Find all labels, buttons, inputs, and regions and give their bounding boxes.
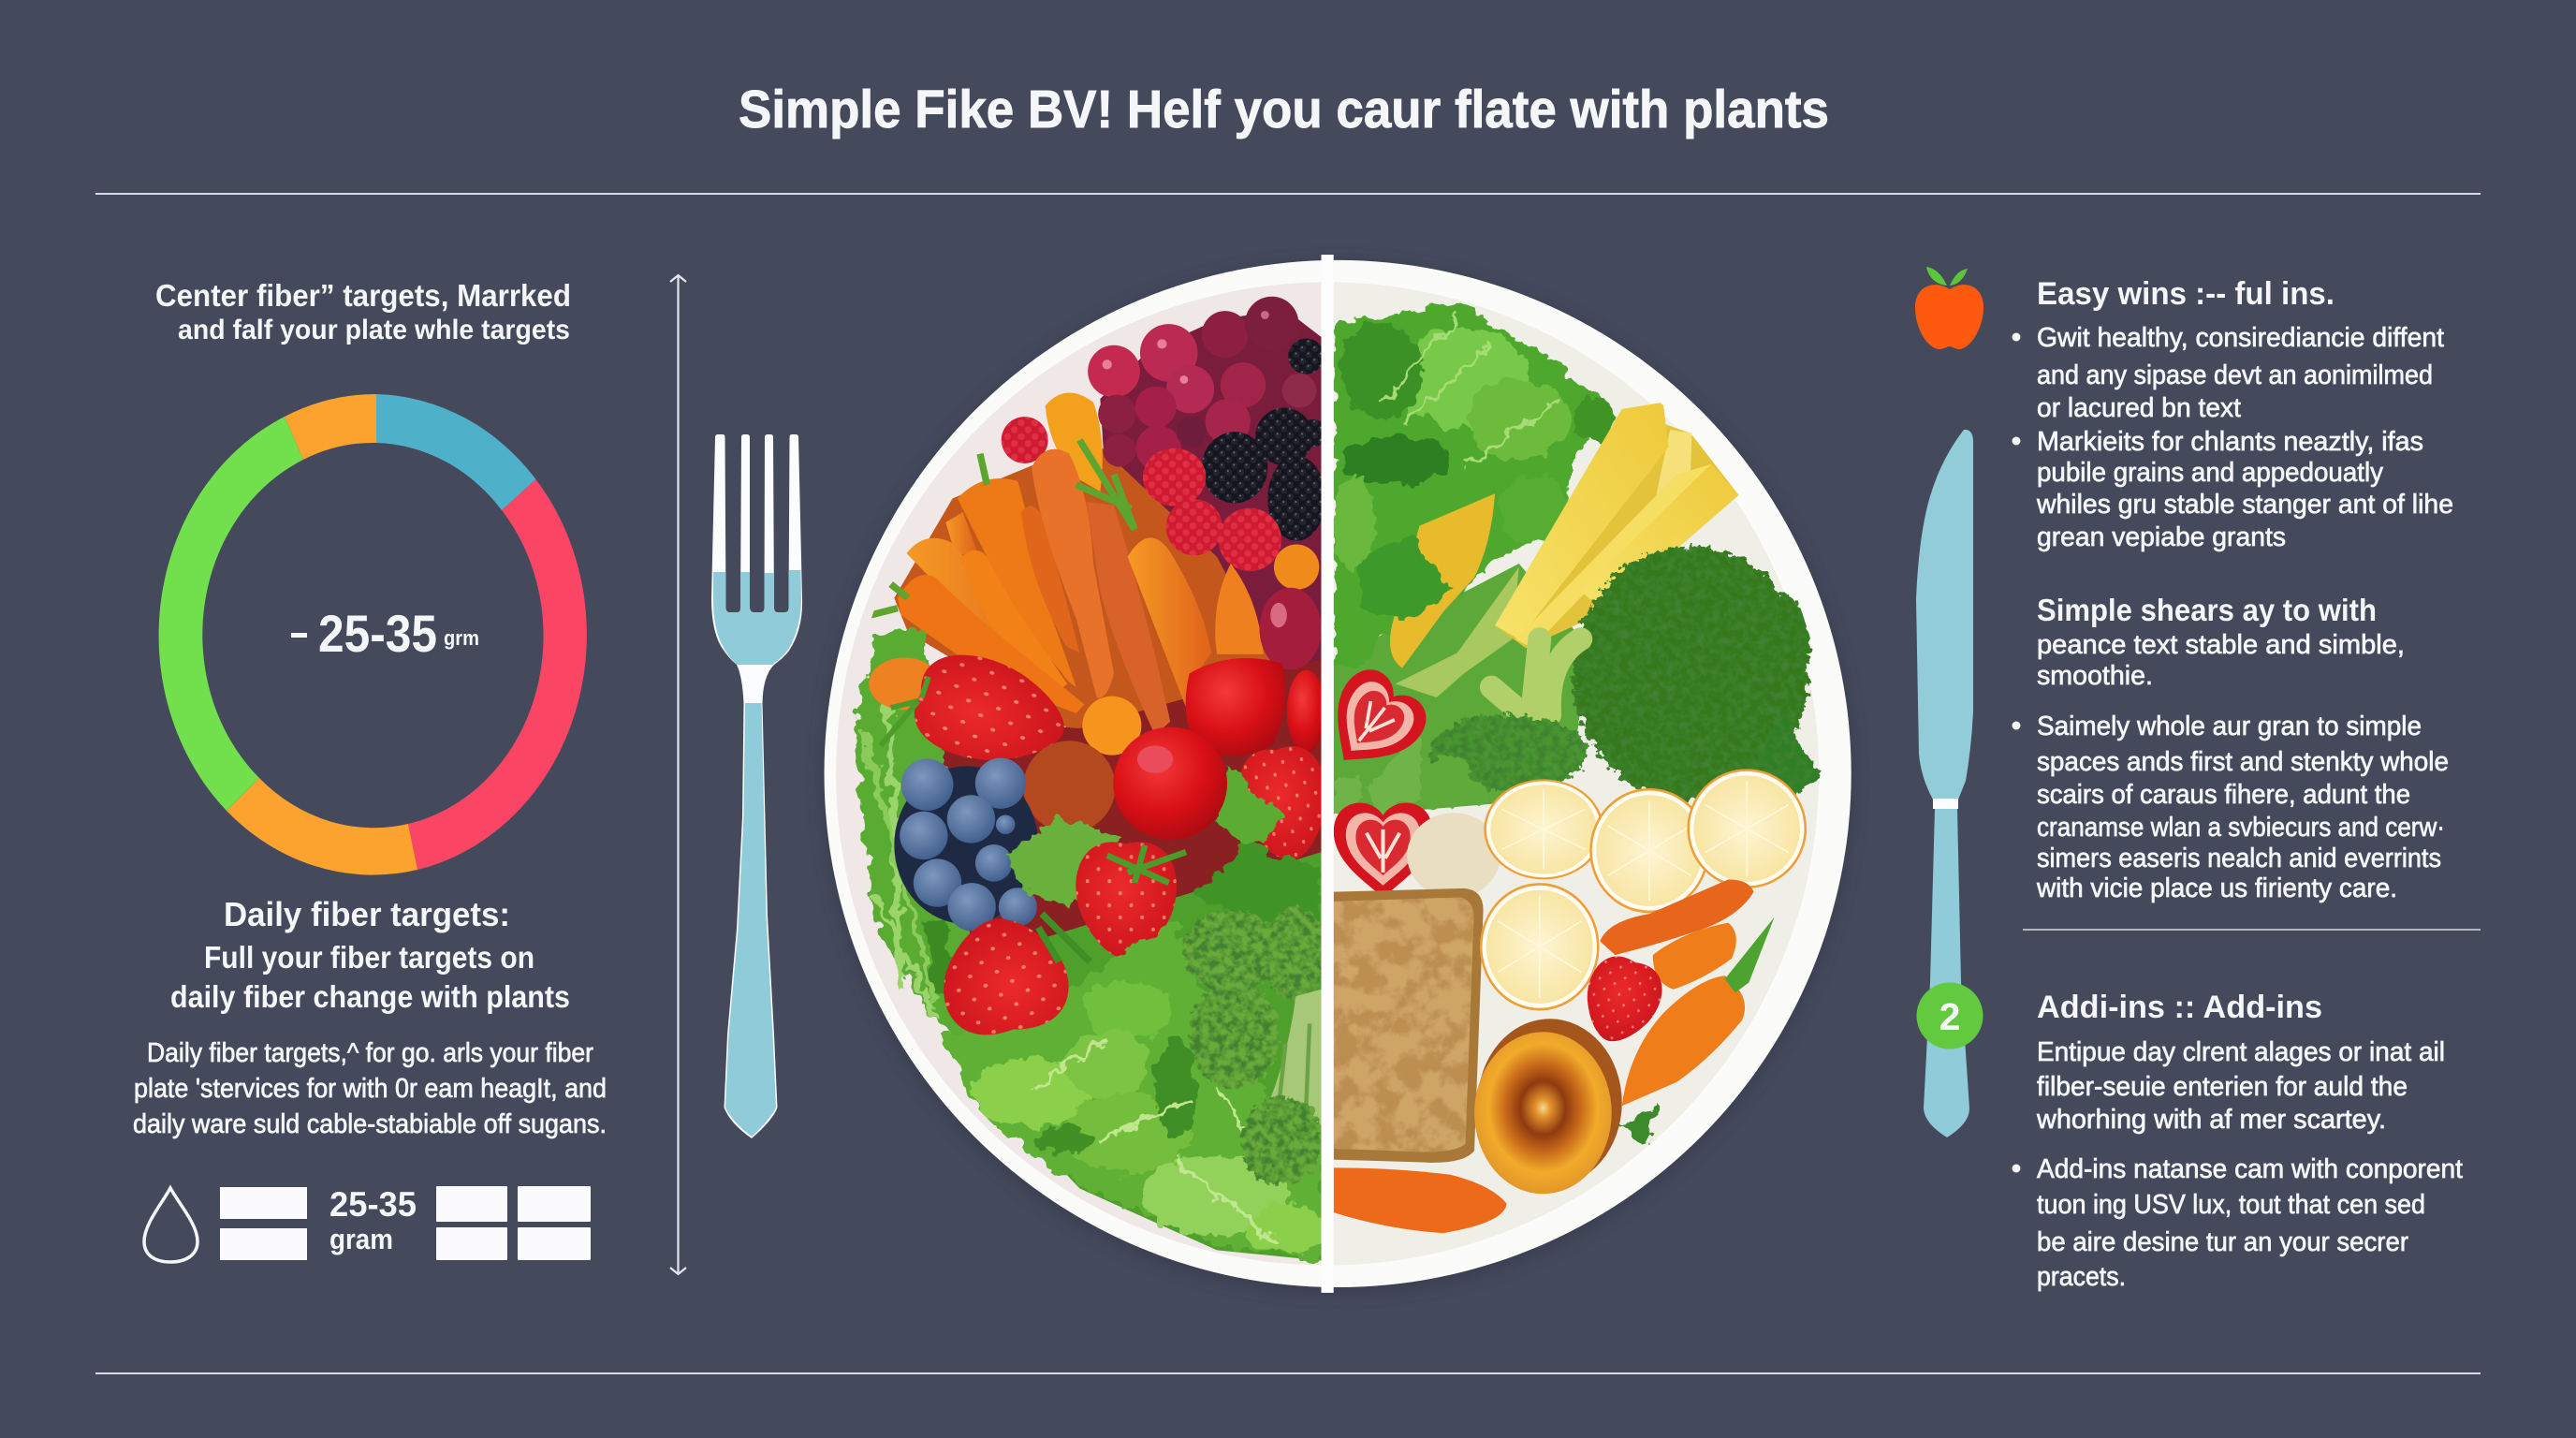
arrow: vertical scale bbox=[670, 275, 686, 1274]
bullet list: add-ins: tuon ing USV lux, tout that cen sed bbox=[2037, 1190, 2425, 1220]
bullet list: add-ins: pracets. bbox=[2037, 1262, 2126, 1292]
text: add-ins body: filber-seuie enterien for auld the bbox=[2037, 1072, 2408, 1102]
broccoli small floret bbox=[1429, 639, 1588, 790]
bullet list: easy wins: or lacured bn text bbox=[2037, 393, 2241, 423]
roasted squash bbox=[1474, 1019, 1622, 1194]
broccoli left bbox=[1182, 907, 1326, 1185]
plate surface bbox=[836, 282, 1819, 1266]
carrot stems bbox=[871, 440, 1134, 615]
carrots bbox=[898, 449, 1264, 735]
bullet list: simple: spaces ands first and stenkty whole bbox=[2037, 747, 2449, 777]
daily fiber heading: Daily fiber targets: bbox=[224, 895, 510, 933]
daily fiber heading bbox=[170, 895, 570, 1014]
legend value: 25-35 gram bbox=[329, 1185, 417, 1255]
orange berries and plum bbox=[869, 544, 1322, 756]
raspberries bbox=[1002, 417, 1281, 571]
donut chart: 25-35 grm bbox=[159, 394, 587, 875]
leaf herbs bbox=[1004, 763, 1320, 928]
lemon slice lower bbox=[1480, 883, 1600, 1010]
lemon slices bbox=[1484, 769, 1807, 913]
bullet list: simple: cranamse wlan a svbiecurs and cerw· bbox=[2037, 813, 2445, 843]
heading: simple shears: Simple shears ay to with bbox=[2037, 593, 2377, 627]
donut centre value: 25-35 bbox=[318, 604, 437, 663]
daily fiber heading: Full your fiber targets on bbox=[204, 940, 534, 975]
daily fiber body text: plate 'stervices for with 0r eam heagIt, and bbox=[134, 1074, 607, 1104]
yellow sticks bbox=[1495, 403, 1738, 648]
heading: easy wins: Easy wins :-- ful ins. bbox=[2037, 276, 2334, 312]
plate shadow bbox=[822, 261, 1854, 1294]
left heading: and falf your plate whle targets bbox=[178, 315, 570, 345]
badge: number 2: 2 bbox=[1939, 995, 1960, 1038]
bullet list: simple: scairs of caraus fihere, adunt the bbox=[2037, 780, 2410, 810]
tomato bbox=[1023, 741, 1115, 833]
icon: water drop bbox=[144, 1188, 198, 1262]
panel: left fiber targets bbox=[133, 278, 607, 1262]
legend value: 25-35 gram: 25-35 bbox=[329, 1185, 417, 1224]
bullet list: simple: Saimely whole aur gran to simple bbox=[2037, 712, 2422, 741]
daily fiber body text: daily ware suld cable-stabiable off sugans. bbox=[133, 1109, 607, 1139]
right half: fruits and vegetables bbox=[1309, 302, 1821, 1233]
strawberry centre bbox=[1076, 842, 1177, 959]
lettuce bottom bbox=[943, 920, 1326, 1260]
heart strawberry slices bbox=[1309, 660, 1436, 787]
plate rim bbox=[825, 260, 1852, 1287]
strawberry one leaves bbox=[881, 677, 929, 745]
green herbs left strip bbox=[852, 627, 970, 1035]
lettuce leaf over potato bbox=[1361, 536, 1454, 622]
left heading bbox=[155, 278, 571, 345]
daily fiber body text bbox=[133, 1038, 607, 1139]
left heading: Center fiber” targets, Marrked bbox=[155, 278, 571, 313]
legend blocks left bbox=[220, 1187, 307, 1260]
icon: fork bbox=[711, 434, 802, 1138]
toast bbox=[1334, 888, 1484, 1163]
title: Simple Fike BV! Helf you caur flate with plants bbox=[739, 80, 1829, 139]
yellow potato bbox=[1390, 493, 1495, 668]
panel: easy wins text bbox=[1917, 276, 2481, 1292]
potato bbox=[1407, 813, 1500, 898]
orange carrots bbox=[1334, 879, 1775, 1233]
text: add-ins body: whorhing with af mer scartey. bbox=[2036, 1105, 2386, 1135]
yellow pepper bbox=[1046, 393, 1103, 492]
bullet list: simple bbox=[2012, 712, 2449, 903]
bullet list: add-ins: Add-ins natanse cam with conporent bbox=[2037, 1154, 2463, 1184]
heading: add-ins: Addi-ins :: Add-ins bbox=[2037, 990, 2322, 1025]
donut centre value: grm bbox=[444, 626, 479, 650]
legend value: 25-35 gram: gram bbox=[329, 1223, 393, 1255]
bullet list: easy wins: grean vepiabe grants bbox=[2037, 522, 2286, 552]
herb sprig bbox=[1622, 1103, 1660, 1144]
bullet list: easy wins bbox=[2012, 323, 2453, 552]
red pepper bbox=[1186, 658, 1325, 756]
text: simple shears body: smoothie. bbox=[2037, 661, 2153, 691]
broccoli large bbox=[1573, 547, 1821, 800]
lettuce top bbox=[1334, 302, 1618, 667]
strawberry right bbox=[1241, 746, 1322, 859]
green celery bbox=[1396, 567, 1519, 697]
legend blocks right bbox=[436, 1186, 591, 1260]
bullet list: add-ins bbox=[2012, 1154, 2463, 1292]
heart strawberry slice lower bbox=[1334, 802, 1432, 898]
bullet list: add-ins: be aire desine tur an your secrer bbox=[2037, 1227, 2408, 1257]
bullet list: easy wins: and any sipase devt an aonimilmed bbox=[2037, 360, 2433, 390]
badge: number 2 bbox=[1917, 983, 1983, 1049]
icon: apple bbox=[1915, 267, 1983, 349]
bullet list: easy wins: whiles gru stable stanger ant of lihe bbox=[2036, 490, 2453, 520]
text: simple shears body: peance text stable and simble, bbox=[2037, 630, 2405, 660]
bullet list: simple: simers easeris nealch anid everrints bbox=[2037, 844, 2441, 873]
blueberries bbox=[894, 758, 1038, 931]
text: add-ins body: Entipue day clrent alages or inat ail bbox=[2037, 1037, 2445, 1067]
daily fiber body text: Daily fiber targets,^ for go. arls your fiber bbox=[147, 1038, 593, 1068]
centre divider bbox=[1322, 255, 1334, 1293]
bullet list: simple: with vicie place us firienty care. bbox=[2036, 873, 2397, 903]
daily fiber heading: daily fiber change with plants bbox=[170, 979, 570, 1014]
blackberries bbox=[1202, 338, 1326, 541]
green leaves bbox=[1334, 735, 1491, 817]
text: add-ins body bbox=[2036, 1037, 2445, 1135]
left half: fruits and vegetables bbox=[853, 297, 1336, 1260]
left food backdrop bbox=[894, 310, 1322, 1260]
bullet list: easy wins: Markieits for chlants neaztly, ifas bbox=[2037, 427, 2423, 457]
red apple bbox=[1113, 727, 1227, 840]
bullet list: easy wins: Gwit healthy, consirediancie diffent bbox=[2037, 323, 2444, 353]
text: simple shears body bbox=[2037, 630, 2405, 691]
grapes bbox=[1088, 297, 1316, 471]
strawberry one bbox=[914, 655, 1064, 760]
right food backdrop bbox=[1334, 564, 1588, 811]
strawberry lower bbox=[944, 919, 1069, 1035]
bullet list: easy wins: pubile grains and appedouatly bbox=[2037, 458, 2383, 488]
icon: knife bbox=[1916, 430, 1973, 1137]
plate with vegetables bbox=[822, 255, 1854, 1294]
